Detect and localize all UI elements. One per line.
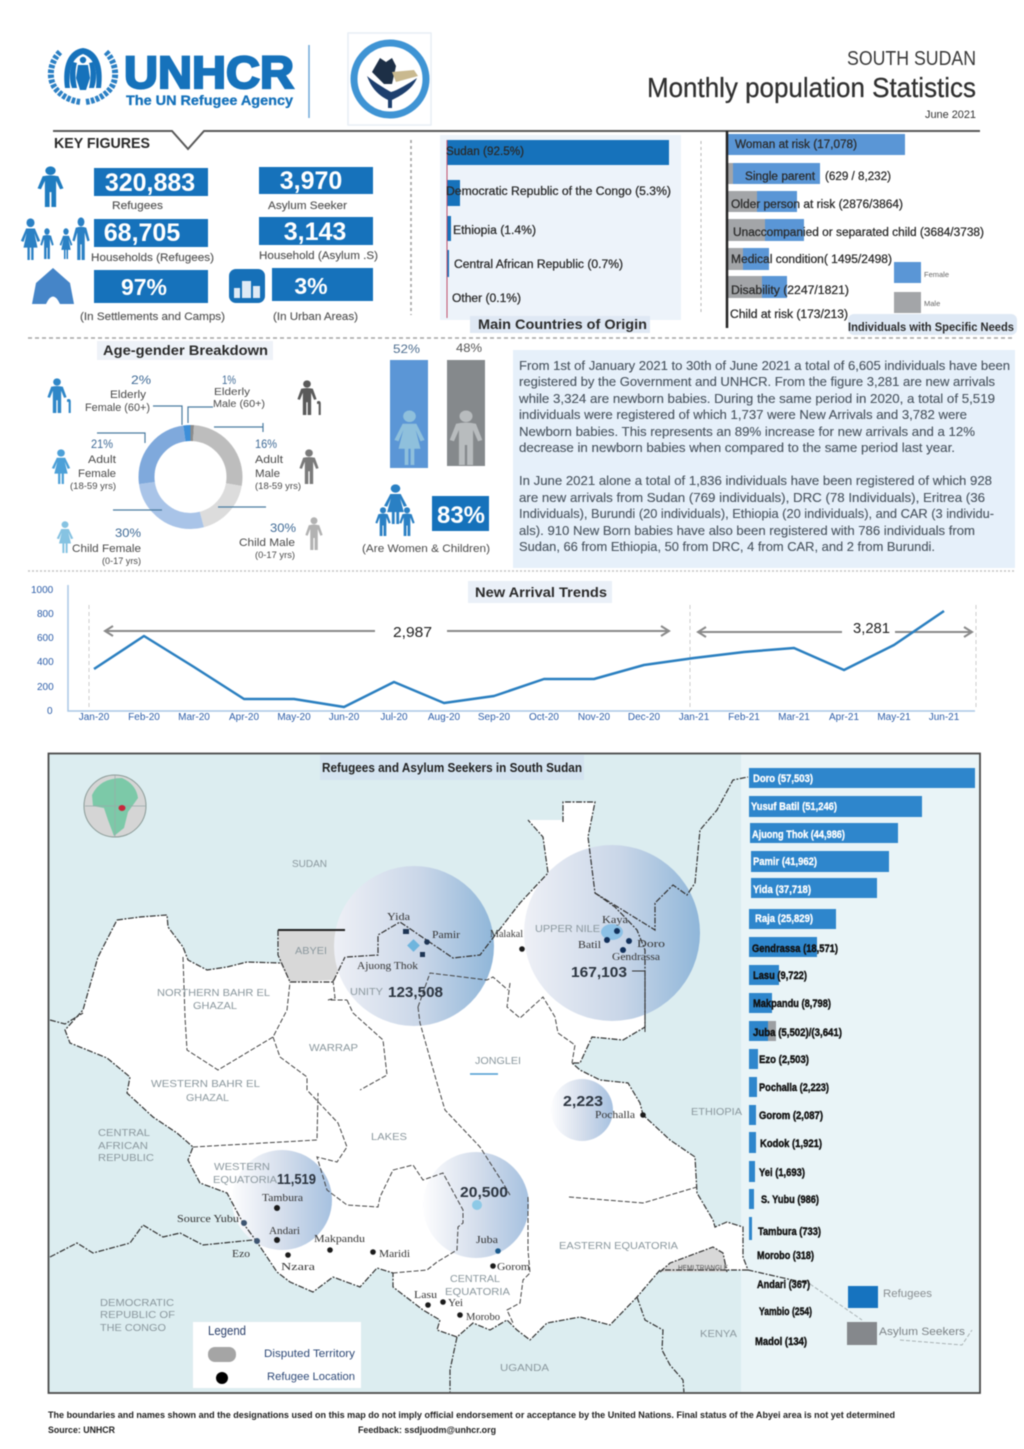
region labels: HEMI TRIANGLE — [678, 1265, 728, 1272]
state population values — [277, 964, 627, 1201]
figure: refugee households: Households (Refugees) — [91, 252, 214, 264]
x axis labels: May-20 — [277, 712, 311, 723]
figure: refugees: Refugees — [112, 200, 164, 212]
arrow: 2020 total — [105, 626, 669, 636]
label: elderly female: Female (60+) — [85, 402, 150, 414]
Ilemi triangle — [660, 1247, 727, 1272]
Abyei disputed area — [278, 930, 338, 982]
origin labels: Central African Republic (0.7%) — [454, 259, 623, 271]
settlement names: Pamir — [432, 930, 461, 941]
figure: settlements and camps: (In Settlements and Camps) — [80, 311, 225, 323]
bar chart: population by location: Morobo (318) — [757, 1250, 814, 1262]
region labels: JONGLEI — [475, 1055, 521, 1067]
settlement names: Yida — [387, 912, 410, 923]
circle: Upper Nile — [524, 845, 700, 1021]
panel: key figures — [21, 135, 378, 323]
settlement names: Source Yubu — [177, 1214, 240, 1225]
legend: male — [894, 292, 940, 313]
bar chart: population by location: Ajuong Thok (44,986) — [752, 829, 845, 841]
icon: elderly female — [47, 378, 71, 413]
settlement names: Lasu — [414, 1290, 438, 1301]
region labels: UPPER NILE — [535, 923, 600, 935]
figure: asylum seekers: 3,970 — [280, 167, 342, 195]
paragraph: first half of year: decrease in newborn babies when compared to the same period last year. — [519, 441, 955, 455]
value: 2020 total: 2,987 — [393, 625, 432, 641]
y axis: 200 — [37, 682, 54, 693]
figure: refugees: 320,883 — [105, 169, 195, 197]
state population values: 167,103 — [571, 964, 627, 981]
bar chart: population by location: Gendrassa (18,571) — [752, 943, 838, 955]
bar chart: population by location: Pamir (41,962) — [753, 856, 817, 868]
needs labels: Single parent — [745, 171, 816, 183]
label: adult female: Adult — [88, 454, 116, 466]
bar chart: population by location — [749, 768, 975, 1348]
y axis: 1000 — [31, 585, 54, 596]
region labels: GHAZAL — [186, 1092, 229, 1104]
icon: woman and children — [375, 484, 415, 536]
label: elderly female: Elderly — [110, 389, 147, 401]
date: June 2021 — [925, 109, 976, 121]
panel: individuals with specific needs — [727, 131, 1017, 335]
paragraph: June 2021: Sudan, 66 from Ethiopia, 50 from DRC, 4 from CAR, and 2 from Burundi. — [519, 540, 935, 554]
label: child female: 30% — [115, 526, 141, 540]
icon: globe locator — [84, 775, 146, 837]
icon: refugee person — [38, 166, 63, 207]
region labels: EASTERN EQUATORIA — [559, 1240, 678, 1252]
heading: Main Countries of Origin — [478, 316, 647, 332]
x axis labels: Jun-20 — [329, 712, 360, 723]
bar chart: population by location: Pochalla (2,223) — [759, 1082, 829, 1094]
female bars — [727, 134, 905, 298]
circle: Jonglei — [551, 1079, 613, 1141]
label: adult female: 21% — [91, 437, 113, 451]
settlement names: Kaya — [602, 915, 628, 926]
circle: Central Equatoria — [423, 1152, 529, 1258]
x axis labels: Jan-21 — [679, 712, 710, 723]
paragraph: first half of year: registered by the Government and UNHCR. From the figure 3,281 are new arrivals — [519, 375, 995, 389]
label: child male: (0-17 yrs) — [255, 550, 295, 561]
heading: New Arrival Trends — [475, 584, 607, 600]
paragraph: June 2021: Individuals), Burundi (20 individuals), Ethiopia (20 individuals), and CAR (3 individu- — [519, 507, 994, 521]
region labels — [98, 858, 742, 1374]
region labels: THE CONGO — [100, 1322, 166, 1334]
heading — [848, 314, 1017, 335]
partner logo — [348, 33, 431, 125]
disclaimer: The boundaries and names shown and the designations used on this map do not imply official endorsement or acceptance by the United Nations. Final status of the Abyei area is not yet determined — [48, 1410, 895, 1420]
figure: urban areas: 3% — [294, 273, 328, 299]
region labels: WARRAP — [309, 1042, 358, 1054]
figure: women and children: 83% — [437, 502, 485, 529]
settlement names: Gendrassa — [612, 952, 660, 963]
paragraph: June 2021: In June 2021 alone a total of 1,836 individuals have been registered of which 928 — [519, 474, 992, 488]
region labels: WESTERN — [214, 1161, 270, 1173]
title — [647, 48, 976, 121]
male bars — [727, 163, 765, 298]
map title: Refugees and Asylum Seekers in South Sudan — [322, 761, 582, 775]
South Sudan territory — [65, 802, 748, 1340]
label: elderly male — [213, 373, 265, 410]
paragraph: June 2021 — [519, 474, 994, 554]
figure: settlements and camps: 97% — [121, 274, 167, 300]
settlement names: Andari — [269, 1226, 300, 1237]
label: adult male: (18-59 yrs) — [255, 481, 301, 492]
x axis labels: May-21 — [877, 712, 911, 723]
legend: female — [894, 262, 949, 283]
settlement names: Doro — [637, 939, 665, 950]
map title — [320, 755, 584, 780]
x axis labels: Feb-20 — [128, 712, 160, 723]
figure: settlements and camps — [80, 270, 225, 323]
figure: women and children — [362, 496, 490, 555]
region labels: EQUATORIA — [213, 1174, 277, 1186]
settlement names: Ajuong Thok — [357, 961, 419, 972]
panel: age-gender breakdown — [47, 341, 323, 567]
label: adult female: Female — [78, 468, 116, 480]
label: elderly male: 1% — [222, 373, 236, 387]
refugee location: Refugee Location — [267, 1371, 355, 1383]
settlement names: Malakal — [490, 929, 523, 940]
label: adult male — [255, 437, 301, 492]
icon: family — [21, 217, 90, 260]
region labels: GHAZAL — [193, 1000, 237, 1012]
label: elderly female — [85, 373, 151, 414]
paragraph: June 2021: are new arrivals from Sudan (769 individuals), DRC (78 Individuals), Eritrea (36 — [519, 491, 985, 505]
heading: Individuals with Specific Needs — [848, 322, 1014, 334]
x axis labels: Mar-21 — [778, 712, 810, 723]
chart legend: refugees: Refugees — [883, 1288, 933, 1300]
legend: male: Male — [924, 299, 940, 308]
origin labels: Sudan (92.5%) — [446, 146, 524, 158]
x axis labels: Mar-20 — [178, 712, 210, 723]
bar chart: population by location: Gorom (2,087) — [759, 1110, 823, 1122]
region labels: CENTRAL — [98, 1127, 150, 1139]
y axis: 400 — [37, 657, 54, 668]
region labels: REPUBLIC OF — [100, 1309, 175, 1321]
settlement names: Tambura — [262, 1193, 303, 1204]
chart legend: asylum seekers — [847, 1322, 966, 1345]
feedback: Feedback: ssdjuodm@unhcr.org — [358, 1425, 496, 1435]
y axis: 0 — [47, 706, 53, 717]
UNHCR logo — [51, 47, 294, 108]
settlement names: Gorom — [497, 1262, 530, 1273]
disputed territory — [208, 1347, 356, 1362]
chart legend: asylum seekers: Asylum Seekers — [879, 1326, 966, 1338]
settlement names: Pochalla — [595, 1110, 635, 1121]
arrow: 2021 total — [698, 627, 972, 637]
icon: adult female — [52, 449, 70, 484]
x axis labels: Sep-20 — [478, 712, 511, 723]
y axis — [31, 585, 54, 717]
figure: asylum households: Household (Asylum .S) — [259, 250, 378, 262]
bar chart: population by location: Kodok (1,921) — [760, 1138, 822, 1150]
male bar — [447, 341, 485, 466]
paragraph: first half of year — [518, 359, 1010, 455]
bar chart: population by location: Doro (57,503) — [753, 773, 813, 785]
label: elderly female: 2% — [131, 373, 151, 387]
icon: child female — [57, 521, 73, 553]
needs labels: Unaccompanied or separated child (3684/3738) — [733, 227, 984, 239]
origin labels: Other (0.1%) — [452, 293, 521, 305]
figure: refugees — [94, 168, 208, 212]
origin labels: Democratic Republic of the Congo (5.3%) — [446, 186, 671, 198]
map legend — [193, 1322, 361, 1388]
location markers — [241, 924, 646, 1318]
label: child female — [72, 526, 141, 567]
settlement names — [177, 912, 665, 1323]
needs labels: Child at risk (173/213) — [730, 309, 848, 321]
icon: UNHCR emblem — [51, 48, 115, 102]
paragraph: first half of year: while 3,324 are newborn babies. During the same period in 2020, a total of 5,519 — [518, 392, 995, 406]
state population values: 123,508 — [388, 984, 443, 1001]
donut chart — [146, 433, 234, 521]
heading: KEY FIGURES — [54, 135, 150, 152]
y axis: 600 — [37, 633, 54, 644]
label: child male: Child Male — [239, 537, 295, 549]
footer — [48, 1410, 895, 1435]
x axis labels: Feb-21 — [728, 712, 760, 723]
figure: asylum seekers: Asylum Seeker — [268, 200, 347, 212]
bar chart: population by location: Tambura (733) — [758, 1226, 821, 1238]
state population values: 11,519 — [277, 1171, 316, 1188]
region labels: EQUATORIA — [445, 1286, 510, 1298]
region labels: UNITY — [350, 986, 383, 998]
region labels: REPUBLIC — [98, 1152, 154, 1164]
x axis labels: Jun-21 — [929, 712, 960, 723]
male bar: 48% — [456, 341, 482, 355]
label: child female: (0-17 yrs) — [102, 556, 141, 567]
icon: child male — [305, 517, 323, 550]
region labels: SUDAN — [292, 858, 327, 870]
label: adult male: Adult — [255, 454, 283, 466]
region labels: AFRICAN — [98, 1140, 148, 1152]
x axis labels: Apr-21 — [829, 712, 859, 723]
source: Source: UNHCR — [48, 1425, 115, 1435]
figure: women and children: (Are Women & Children) — [362, 543, 490, 555]
y axis: 800 — [37, 609, 54, 620]
wordmark: UNHCR — [124, 47, 294, 98]
panel: main countries of origin — [440, 135, 681, 333]
state population values: 20,500 — [460, 1184, 508, 1201]
paragraph: first half of year: individuals were registered of which 1,737 were New Arrivals and 3,782 were — [519, 408, 967, 422]
refugee location — [216, 1371, 355, 1384]
paragraph: first half of year: Newborn babies. This represents an 89% increase for new arrivals and a 12% — [519, 425, 975, 439]
needs labels — [730, 139, 984, 321]
paragraph: June 2021: als). 910 New Born babies have also been registered with 786 individuals from — [519, 524, 975, 538]
heading — [468, 581, 612, 603]
needs labels: Woman at risk (17,078) — [735, 139, 857, 151]
figure: refugee households — [91, 219, 214, 264]
disputed territory: Disputed Territory — [264, 1348, 356, 1360]
icon: urban buildings — [229, 269, 265, 303]
needs labels: Older person at risk (2876/3864) — [731, 199, 903, 211]
legend heading: Legend — [208, 1324, 246, 1338]
panel: sex split and women and children — [362, 341, 490, 555]
needs labels: Disability (2247/1821) — [731, 285, 849, 297]
label: elderly male: Elderly — [214, 387, 250, 398]
region labels: DEMOCRATIC — [100, 1297, 174, 1309]
settlement names: Yei — [448, 1298, 463, 1309]
heading: country: SOUTH SUDAN — [847, 48, 976, 70]
x axis labels — [79, 712, 960, 723]
heading: Age-gender Breakdown — [103, 342, 268, 358]
origin labels — [446, 146, 671, 305]
circle: Unity — [334, 866, 494, 1026]
bar chart: population by location: Raja (25,829) — [755, 913, 813, 925]
needs labels: (629 / 8,232) — [825, 171, 891, 183]
label: adult female: (18-59 yrs) — [70, 481, 116, 492]
region labels: LAKES — [371, 1131, 407, 1143]
bar chart: population by location: Makpandu (8,798) — [753, 998, 831, 1010]
figure: refugee households: 68,705 — [104, 219, 180, 247]
line chart: new arrival trends — [31, 581, 976, 723]
region labels: UGANDA — [500, 1362, 549, 1374]
label: elderly male: Male (60+) — [213, 399, 265, 410]
figure: urban areas — [272, 268, 373, 323]
bar chart: population by location: Lasu (9,722) — [753, 970, 807, 982]
paragraph: first half of year: From 1st of January 2021 to 30th of June 2021 a total of 6,605 individuals have been — [519, 359, 1010, 373]
region labels: WESTERN BAHR EL — [151, 1078, 260, 1090]
region labels: ETHIOPIA — [691, 1106, 742, 1118]
label: child female: Child Female — [72, 543, 141, 555]
tagline: The UN Refugee Agency — [126, 92, 293, 108]
settlement names: Juba — [476, 1235, 498, 1246]
label: child male: 30% — [270, 521, 296, 535]
figure: asylum households: 3,143 — [284, 218, 346, 246]
x axis labels: Aug-20 — [428, 712, 461, 723]
bar chart: population by location: Yusuf Batil (51,246) — [751, 801, 837, 813]
figure: asylum households — [259, 217, 378, 262]
x axis labels: Nov-20 — [578, 712, 611, 723]
label: adult female — [70, 437, 116, 492]
female bar: 52% — [393, 342, 420, 356]
label: adult male: Male — [255, 468, 280, 480]
heading: report name: Monthly population Statistics — [647, 72, 976, 103]
boundaries — [50, 777, 810, 1393]
text block: narrative — [513, 350, 1015, 568]
female bar — [390, 342, 428, 468]
x axis labels: Jan-20 — [79, 712, 110, 723]
origin labels: Ethiopia (1.4%) — [453, 225, 536, 237]
region labels: ABYEI — [295, 945, 327, 957]
x axis labels: Apr-20 — [229, 712, 259, 723]
legend: female: Female — [924, 270, 949, 279]
needs labels: Medical condition( 1495/2498) — [731, 254, 892, 266]
bar chart: population by location: Yei (1,693) — [759, 1167, 805, 1179]
settlement names: Ezo — [232, 1249, 250, 1260]
region labels: NORTHERN BAHR EL — [157, 987, 270, 999]
settlement names: Batil — [578, 940, 601, 951]
settlement names: Morobo — [466, 1312, 500, 1323]
bar chart: population by location: Madol (134) — [755, 1336, 807, 1348]
figure: asylum seekers — [259, 167, 373, 212]
origin bars — [447, 140, 669, 277]
circle: Western Equatoria — [232, 1150, 332, 1250]
x axis labels: Oct-20 — [529, 712, 559, 723]
label: child male — [239, 521, 296, 561]
bar chart: population by location: Juba (5,502)/(3,641) — [753, 1027, 842, 1039]
label: adult male: 16% — [255, 437, 277, 451]
figure: urban areas: (In Urban Areas) — [273, 311, 358, 323]
data line — [94, 611, 944, 707]
region labels: CENTRAL — [450, 1273, 500, 1285]
x axis labels: Jul-20 — [380, 712, 408, 723]
settlement names: Maridi — [379, 1249, 410, 1260]
state population values: 2,223 — [563, 1093, 603, 1110]
bar chart: population by location: Yida (37,718) — [753, 884, 811, 896]
bar chart: population by location: Yambio (254) — [759, 1306, 812, 1318]
leader lines — [97, 406, 266, 510]
bar chart: population by location: Andari (367) — [757, 1279, 810, 1291]
icon: tent — [32, 268, 74, 304]
settlement names: Makpandu — [314, 1234, 366, 1245]
value: 2021 total: 3,281 — [853, 621, 890, 637]
region labels: KENYA — [700, 1328, 737, 1340]
chart legend: refugees — [848, 1286, 933, 1308]
bar chart: population by location: S. Yubu (986) — [761, 1194, 819, 1206]
bar chart: population by location: Ezo (2,503) — [759, 1054, 809, 1066]
icon: elderly male — [297, 380, 321, 415]
x axis labels: Dec-20 — [628, 712, 661, 723]
icon: adult male — [299, 449, 319, 484]
panel: map of refugees and asylum seekers — [48, 754, 980, 1393]
settlement names: Nzara — [281, 1262, 315, 1273]
